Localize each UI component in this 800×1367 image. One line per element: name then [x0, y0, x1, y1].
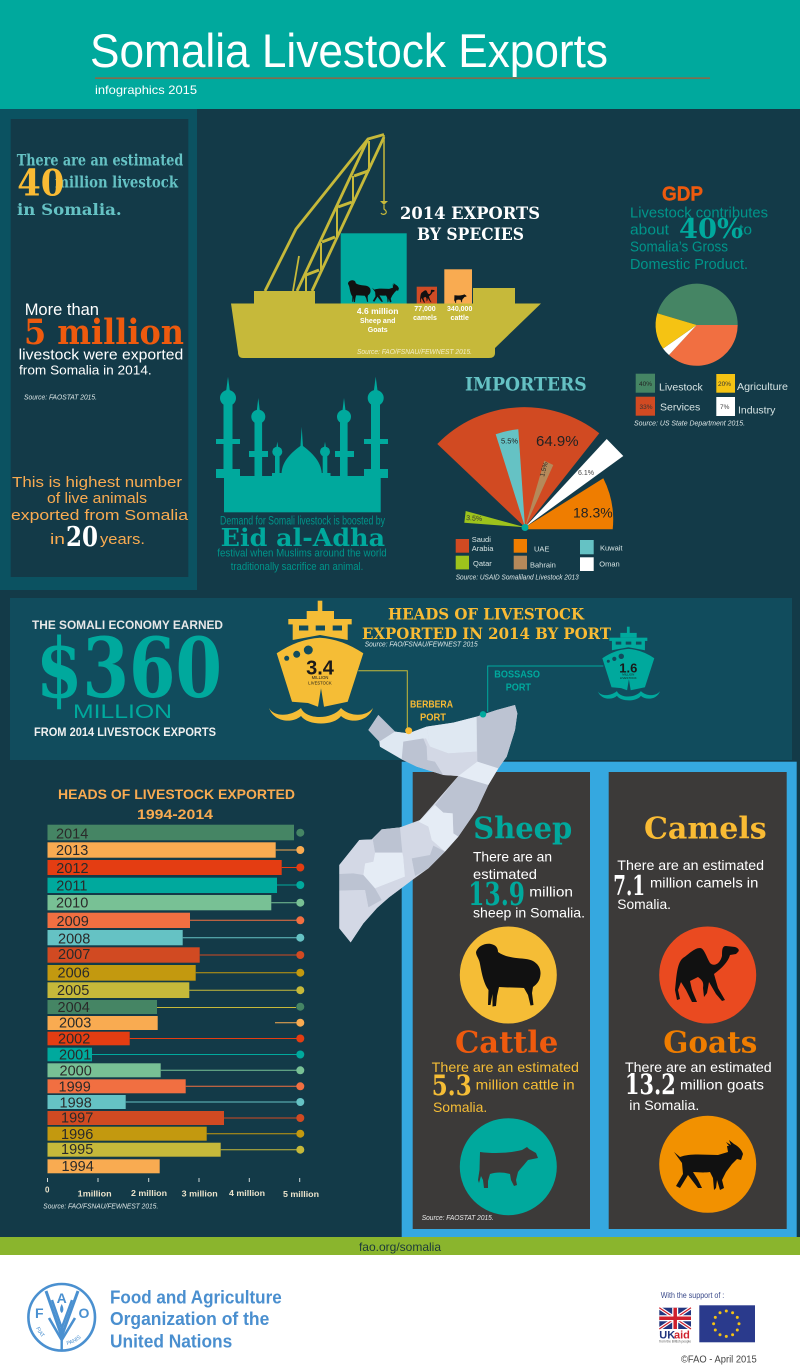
axis: 2 million — [131, 1189, 167, 1198]
year labels: 2011 — [56, 878, 87, 894]
heading: exports by species: 2014 EXPORTS — [400, 204, 540, 224]
year labels: 1997 — [61, 1111, 93, 1127]
cargo labels: cattle — [451, 315, 469, 322]
legend: Agriculture — [737, 381, 788, 393]
marker: Berbera — [405, 727, 412, 734]
icon: FAO logo — [27, 1282, 96, 1352]
chart labels — [466, 433, 613, 523]
text: Eid al-Adha — [217, 516, 387, 573]
label: Berbera port: BERBERA — [410, 699, 453, 710]
subtitle: infographics 2015 — [95, 83, 197, 97]
icon: FAO logo: F — [35, 1305, 44, 1321]
label: Bossaso port: PORT — [506, 683, 531, 694]
heading: 1994-2014 — [137, 806, 213, 822]
website bar — [0, 1237, 800, 1255]
stat: 5 million exported: livestock were exported — [19, 347, 183, 364]
axis: 5 million — [283, 1190, 319, 1199]
legend: Kuwait — [600, 543, 623, 552]
axis: 0 — [45, 1186, 50, 1195]
description: Domestic Product. — [630, 257, 748, 273]
year labels: 2004 — [58, 1000, 90, 1016]
panel: importers — [437, 374, 623, 582]
stat: highest in 20 years: exported from Somalia — [11, 508, 189, 524]
polar pie chart — [437, 407, 623, 531]
stat: $360 million: MILLION — [73, 702, 172, 723]
year labels — [56, 826, 94, 1175]
icon: Bossaso ship — [598, 627, 660, 700]
description: to — [739, 222, 752, 238]
cargo labels: 77,000 — [414, 306, 436, 313]
icon: UK aid — [659, 1308, 691, 1343]
legend: 20% — [718, 381, 731, 388]
year labels: 2009 — [56, 914, 89, 930]
label: Berbera port — [410, 699, 453, 724]
year labels: 1994 — [62, 1159, 94, 1175]
panel: economy and ports — [10, 598, 792, 760]
text: Eid al-Adha: traditionally sacrifice an animal. — [231, 561, 363, 573]
icon: UK aid: from the British people — [659, 1339, 691, 1343]
description: Livestock contributes — [630, 206, 768, 222]
card: sheep: million — [529, 884, 573, 900]
card: goats: There are an estimated — [625, 1059, 772, 1075]
ship hull — [231, 288, 541, 358]
heading: exports by species: BY SPECIES — [417, 225, 524, 245]
chart labels: 18.3% — [573, 504, 613, 520]
heading: heads by port: HEADS OF LIVESTOCK — [388, 604, 585, 623]
heading: GDP — [662, 184, 703, 206]
stat: 40 million livestock: in Somalia. — [17, 200, 122, 219]
axis: 1million — [78, 1190, 112, 1199]
legend: Qatar — [473, 559, 492, 568]
chart labels: 3.5% — [466, 515, 482, 523]
stat: 5 million exported — [19, 301, 184, 378]
year labels: 1999 — [58, 1080, 91, 1096]
chart labels: 5.5% — [501, 437, 518, 446]
cargo labels: camels — [413, 315, 437, 322]
card: camels: There are an estimated — [617, 857, 764, 873]
crane — [265, 134, 388, 291]
card: cattle: Cattle — [455, 1025, 558, 1060]
bars — [48, 825, 294, 1173]
axis: 4 million — [229, 1189, 265, 1198]
icon: Berbera ship — [269, 601, 373, 724]
panel: GDP — [630, 184, 788, 427]
icon: Bossaso ship: LIVESTOCK — [620, 676, 637, 680]
card: camels: million camels in — [650, 875, 758, 891]
icon: Berbera ship: LIVESTOCK — [308, 680, 332, 685]
pie chart — [656, 284, 738, 366]
stat: $360 million: $360 — [36, 621, 222, 717]
stat: highest in 20 years — [11, 475, 189, 553]
label: Berbera port: PORT — [420, 713, 446, 724]
year labels: 2005 — [57, 983, 89, 999]
stat: highest in 20 years: This is highest number — [12, 475, 182, 491]
source note: Source: US State Department 2015. — [634, 418, 745, 427]
organisation name: Food and Agriculture — [110, 1287, 282, 1307]
card: cattle: There are an estimated — [432, 1059, 579, 1075]
legend: Bahrain — [530, 561, 556, 570]
stat: 40 million livestock: There are an estimated — [17, 151, 183, 170]
card: camels: Somalia. — [617, 896, 671, 912]
year labels: 2008 — [58, 931, 90, 947]
organisation name: Organization of the — [110, 1309, 269, 1329]
illustration: mosque — [216, 377, 388, 512]
card: sheep: 13.9 — [468, 875, 525, 913]
icon: Bossaso ship: MILLION — [622, 672, 634, 676]
card: camels — [613, 811, 767, 1024]
card: sheep: estimated — [473, 866, 537, 882]
text: Eid al-Adha: Eid al-Adha — [221, 523, 385, 552]
stat: 40 million livestock: million livestock — [55, 172, 178, 191]
legend: Oman — [599, 560, 620, 569]
year labels: 1995 — [61, 1142, 93, 1158]
organisation name — [110, 1287, 282, 1352]
stat: $360 million: THE SOMALI ECONOMY EARNED — [32, 618, 223, 632]
panel: heads of livestock exported chart — [43, 786, 319, 1210]
card: goats: million goats — [680, 1076, 764, 1092]
website bar: fao.org/somalia — [359, 1240, 441, 1254]
icon: sheep — [460, 926, 557, 1024]
cargo labels: 340,000 — [447, 306, 472, 313]
card: goats: 13.2 — [625, 1068, 676, 1101]
axis: 3 million — [182, 1190, 218, 1199]
description — [630, 206, 768, 273]
year labels: 2013 — [56, 843, 88, 859]
legend: Livestock — [659, 382, 704, 394]
card: cattle — [422, 1025, 579, 1222]
card: goats: Goats — [663, 1025, 757, 1060]
heading: HEADS OF LIVESTOCK EXPORTED — [58, 786, 295, 802]
legend: Services — [660, 402, 700, 414]
source note: Source: FAOSTAT 2015. — [24, 394, 97, 401]
card: camels: 7.1 — [613, 871, 645, 902]
map of Somalia — [339, 705, 517, 942]
heading: IMPORTERS — [465, 374, 587, 396]
stat: highest in 20 years: of live animals — [47, 491, 147, 507]
source note: Source: FAO/FSNAU/FEWNEST 2015. — [357, 349, 472, 356]
legend: 33% — [640, 404, 653, 411]
year labels: 2006 — [58, 966, 90, 982]
icon: FAO logo: O — [79, 1305, 90, 1321]
stat: highest in 20 years: 20 — [66, 522, 98, 553]
crate: sheep and goats — [341, 233, 407, 304]
heading: heads by port: EXPORTED IN 2014 BY PORT — [362, 624, 611, 643]
card: goats — [625, 1025, 772, 1213]
header banner — [0, 0, 800, 109]
year labels: 2003 — [59, 1015, 91, 1031]
label: Bossaso port: BOSSASO — [494, 670, 540, 681]
chart labels: 6.1% — [578, 470, 594, 477]
year labels: 2001 — [59, 1048, 91, 1064]
year labels: 2012 — [56, 861, 89, 877]
stat: $360 million: FROM 2014 LIVESTOCK EXPORTS — [34, 725, 216, 739]
icon: goat — [659, 1116, 756, 1213]
description: 40% — [679, 214, 743, 245]
card: sheep: There are an — [473, 849, 552, 865]
icon: UK aid: UK — [659, 1330, 675, 1342]
legend: Saudi — [472, 535, 491, 544]
year labels: 2000 — [60, 1064, 92, 1080]
year labels: 2007 — [58, 947, 90, 963]
marker: Bossaso — [480, 711, 486, 718]
text: Eid al-Adha: Demand for Somali livestock is boosted by — [220, 516, 385, 528]
stat: 5 million exported: More than — [25, 301, 99, 319]
title: Somalia Livestock Exports — [90, 24, 608, 77]
chart labels: 1.5% — [539, 461, 550, 478]
year labels: 2010 — [56, 895, 88, 911]
illustration: cargo ship with exports by species — [231, 134, 541, 358]
icon: FAO logo: PANIS — [66, 1335, 80, 1345]
cargo labels: Sheep and — [360, 318, 395, 325]
stat: 5 million exported: from Somalia in 2014. — [19, 363, 152, 378]
legend: 7% — [720, 404, 730, 411]
card: sheep: sheep in Somalia. — [473, 905, 585, 921]
footer — [0, 1255, 800, 1367]
cargo labels — [357, 306, 472, 334]
support note: With the support of : — [661, 1291, 724, 1300]
card: cattle: Somalia. — [433, 1099, 487, 1115]
card: sheep — [460, 811, 585, 1024]
icon: Berbera ship: 3.4 — [306, 657, 335, 679]
year labels: 1998 — [60, 1095, 92, 1111]
description: Somalia’s Gross — [630, 240, 728, 256]
connector: Berbera — [358, 671, 407, 728]
legend — [636, 374, 788, 416]
source note: Source: USAID Somaliland Livestock 2013 — [456, 575, 579, 582]
card: sheep: Sheep — [473, 811, 572, 846]
stat: 40 million livestock — [17, 151, 183, 219]
stat: 5 million exported: 5 million — [24, 312, 184, 353]
connector lines and end dots — [92, 829, 304, 1154]
axis — [45, 1178, 319, 1199]
connector: Bossaso — [488, 666, 603, 712]
icon: Bossaso ship: 1.6 — [619, 660, 637, 675]
cargo labels: Goats — [368, 327, 388, 334]
legend: UAE — [534, 544, 549, 553]
icon: cow — [460, 1118, 557, 1215]
legend — [456, 535, 623, 571]
text: Eid al-Adha: festival when Muslims around the world — [217, 548, 387, 560]
stat: 40 million livestock: 40 — [17, 163, 64, 205]
panel: species frame — [402, 762, 797, 1237]
panel: sheep and cattle — [413, 772, 590, 1229]
crate: camels — [417, 287, 437, 304]
year labels: 2002 — [58, 1031, 90, 1047]
year labels: 2014 — [56, 826, 88, 842]
label: Bossaso port — [494, 670, 540, 694]
year labels: 1996 — [61, 1127, 93, 1143]
source note: Source: FAOSTAT 2015. — [422, 1215, 494, 1222]
source note: Source: FAO/FSNAU/FEWNEST 2015 — [365, 642, 478, 649]
description: about — [630, 222, 669, 238]
legend: 40% — [639, 381, 652, 388]
heading: exports by species — [400, 204, 540, 245]
stat: highest in 20 years: years. — [100, 532, 145, 548]
chart labels: 64.9% — [536, 433, 579, 450]
card: cattle: million cattle in — [476, 1076, 575, 1092]
card: goats: in Somalia. — [629, 1097, 699, 1113]
icon: EU flag — [699, 1305, 755, 1342]
heading — [58, 786, 295, 822]
legend: Industry — [738, 404, 776, 416]
stat: $360 million — [32, 618, 223, 739]
card: cattle: 5.3 — [432, 1069, 472, 1102]
heading: heads by port — [362, 604, 611, 643]
organisation name: United Nations — [110, 1332, 232, 1352]
copyright: ©FAO - April 2015 — [681, 1354, 757, 1365]
cargo labels: 4.6 million — [357, 306, 398, 316]
icon: camel — [659, 926, 756, 1024]
icon: Berbera ship: MILLION — [312, 675, 328, 680]
icon: FAO logo: A — [57, 1290, 67, 1306]
source note: Source: FAO/FSNAU/FEWNEST 2015. — [43, 1203, 158, 1210]
legend: Arabia — [472, 544, 494, 553]
panel: camels and goats — [609, 772, 787, 1229]
stat: highest in 20 years: in — [50, 532, 65, 548]
panel: livestock overview — [0, 109, 197, 590]
crate: cattle — [444, 269, 472, 304]
icon: FAO logo: FIAT — [36, 1326, 45, 1337]
card: camels: Camels — [644, 811, 767, 846]
icon: UK aid: aid — [674, 1330, 690, 1342]
